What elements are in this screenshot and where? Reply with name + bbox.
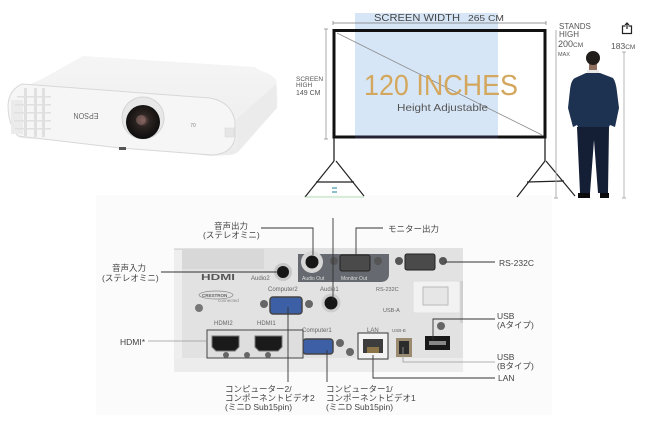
stand height arrow bbox=[554, 30, 558, 198]
callout labels bbox=[102, 221, 534, 412]
screen frame bbox=[334, 30, 545, 137]
HDMI logo: HDMI bbox=[201, 273, 235, 282]
projector photo bbox=[8, 56, 277, 156]
height adjustable caption: Height Adjustable bbox=[397, 102, 488, 114]
screen height label: SCREEN bbox=[296, 76, 323, 83]
callout labels: モニター出力 bbox=[388, 224, 439, 234]
port label texts: Audio Out bbox=[302, 276, 325, 282]
blue grid overlay bbox=[355, 13, 498, 136]
lens bbox=[122, 97, 164, 139]
VGA ports bbox=[270, 297, 333, 354]
dark audio-monitor block bbox=[298, 254, 389, 282]
person bbox=[568, 51, 619, 198]
height arrow bbox=[324, 29, 328, 139]
audio jacks bbox=[274, 251, 340, 312]
callout labels: LAN bbox=[498, 373, 515, 383]
callout labels: コンピューター1/ bbox=[326, 384, 393, 394]
width arrow bbox=[333, 21, 546, 25]
crestron logo: connected bbox=[218, 298, 239, 303]
port label texts bbox=[214, 276, 406, 334]
port label texts: USB-A bbox=[383, 308, 400, 314]
callout labels: HDMI* bbox=[120, 337, 146, 347]
EPSON logo: EPSON bbox=[73, 111, 98, 120]
crestron logo: CRESTRON bbox=[202, 293, 227, 298]
port label texts: Computer2 bbox=[268, 287, 298, 293]
screen diagram bbox=[296, 13, 635, 198]
port label texts: LAN bbox=[367, 328, 379, 334]
HDMI ports bbox=[207, 330, 303, 358]
leader lines bbox=[161, 218, 495, 382]
port label texts: HDMI2 bbox=[214, 321, 233, 327]
port label texts: Audio2 bbox=[251, 276, 270, 282]
port label texts: Audio1 bbox=[320, 287, 339, 293]
stand height label bbox=[558, 22, 591, 58]
port label texts: HDMI1 bbox=[257, 321, 276, 327]
screen height label: HIGH bbox=[296, 82, 313, 89]
callout labels: RS-232C bbox=[499, 258, 534, 268]
person height arrow bbox=[622, 52, 626, 198]
vent grille bbox=[11, 88, 51, 137]
stand height label: STANDS bbox=[559, 22, 591, 31]
callout labels: (Bタイプ) bbox=[497, 361, 534, 371]
screen width label: SCREEN WIDTH bbox=[374, 13, 460, 24]
screen title: 120 INCHES bbox=[364, 70, 518, 102]
stand height label: 200CM bbox=[558, 39, 583, 49]
callout labels: USB bbox=[497, 311, 515, 321]
rear panel bbox=[174, 248, 463, 372]
white cover square bbox=[413, 281, 460, 313]
callout labels: 音声入力 bbox=[112, 263, 146, 273]
USB-A port bbox=[425, 322, 450, 350]
screen height label: 149 CM bbox=[296, 90, 321, 97]
screen height label bbox=[296, 76, 323, 97]
screen diagonal bbox=[337, 33, 542, 135]
stand height label: HIGH bbox=[559, 30, 579, 39]
callout labels: (Aタイプ) bbox=[497, 320, 534, 330]
screen width value: 265 CM bbox=[468, 13, 504, 23]
callout labels: (ミニD Sub15pin) bbox=[225, 402, 292, 412]
callout labels: コンポーネントビデオ2 bbox=[225, 393, 315, 403]
right stand bbox=[517, 138, 575, 197]
callout labels: USB bbox=[497, 352, 515, 362]
callout labels: (ステレオミニ) bbox=[203, 230, 260, 240]
port label texts: Monitor Out bbox=[341, 276, 368, 282]
serial ports bbox=[340, 254, 435, 271]
port label texts: Computer1 bbox=[302, 328, 332, 334]
projector front face bbox=[8, 84, 235, 155]
callout labels: コンポーネントビデオ1 bbox=[326, 393, 416, 403]
stand height label: MAX bbox=[558, 52, 570, 58]
crestron logo bbox=[199, 291, 239, 303]
person height label: 183CM bbox=[611, 41, 635, 51]
port label texts: RS-232C bbox=[376, 287, 399, 293]
model label: 70 bbox=[190, 123, 196, 129]
connector panel photo bbox=[102, 218, 534, 412]
callout labels: (ミニD Sub15pin) bbox=[326, 402, 393, 412]
callout labels: 音声出力 bbox=[214, 221, 248, 231]
USB-B port bbox=[396, 338, 412, 357]
LAN port bbox=[358, 333, 388, 359]
callout labels: コンピューター2/ bbox=[225, 384, 292, 394]
port label texts: USB-B bbox=[392, 328, 406, 333]
projector top and side body bbox=[9, 56, 277, 156]
icon: share bbox=[622, 23, 632, 34]
callout labels: (ステレオミニ) bbox=[102, 273, 159, 283]
left stand bbox=[305, 138, 364, 197]
off-white backdrop of connector photo bbox=[96, 195, 552, 415]
